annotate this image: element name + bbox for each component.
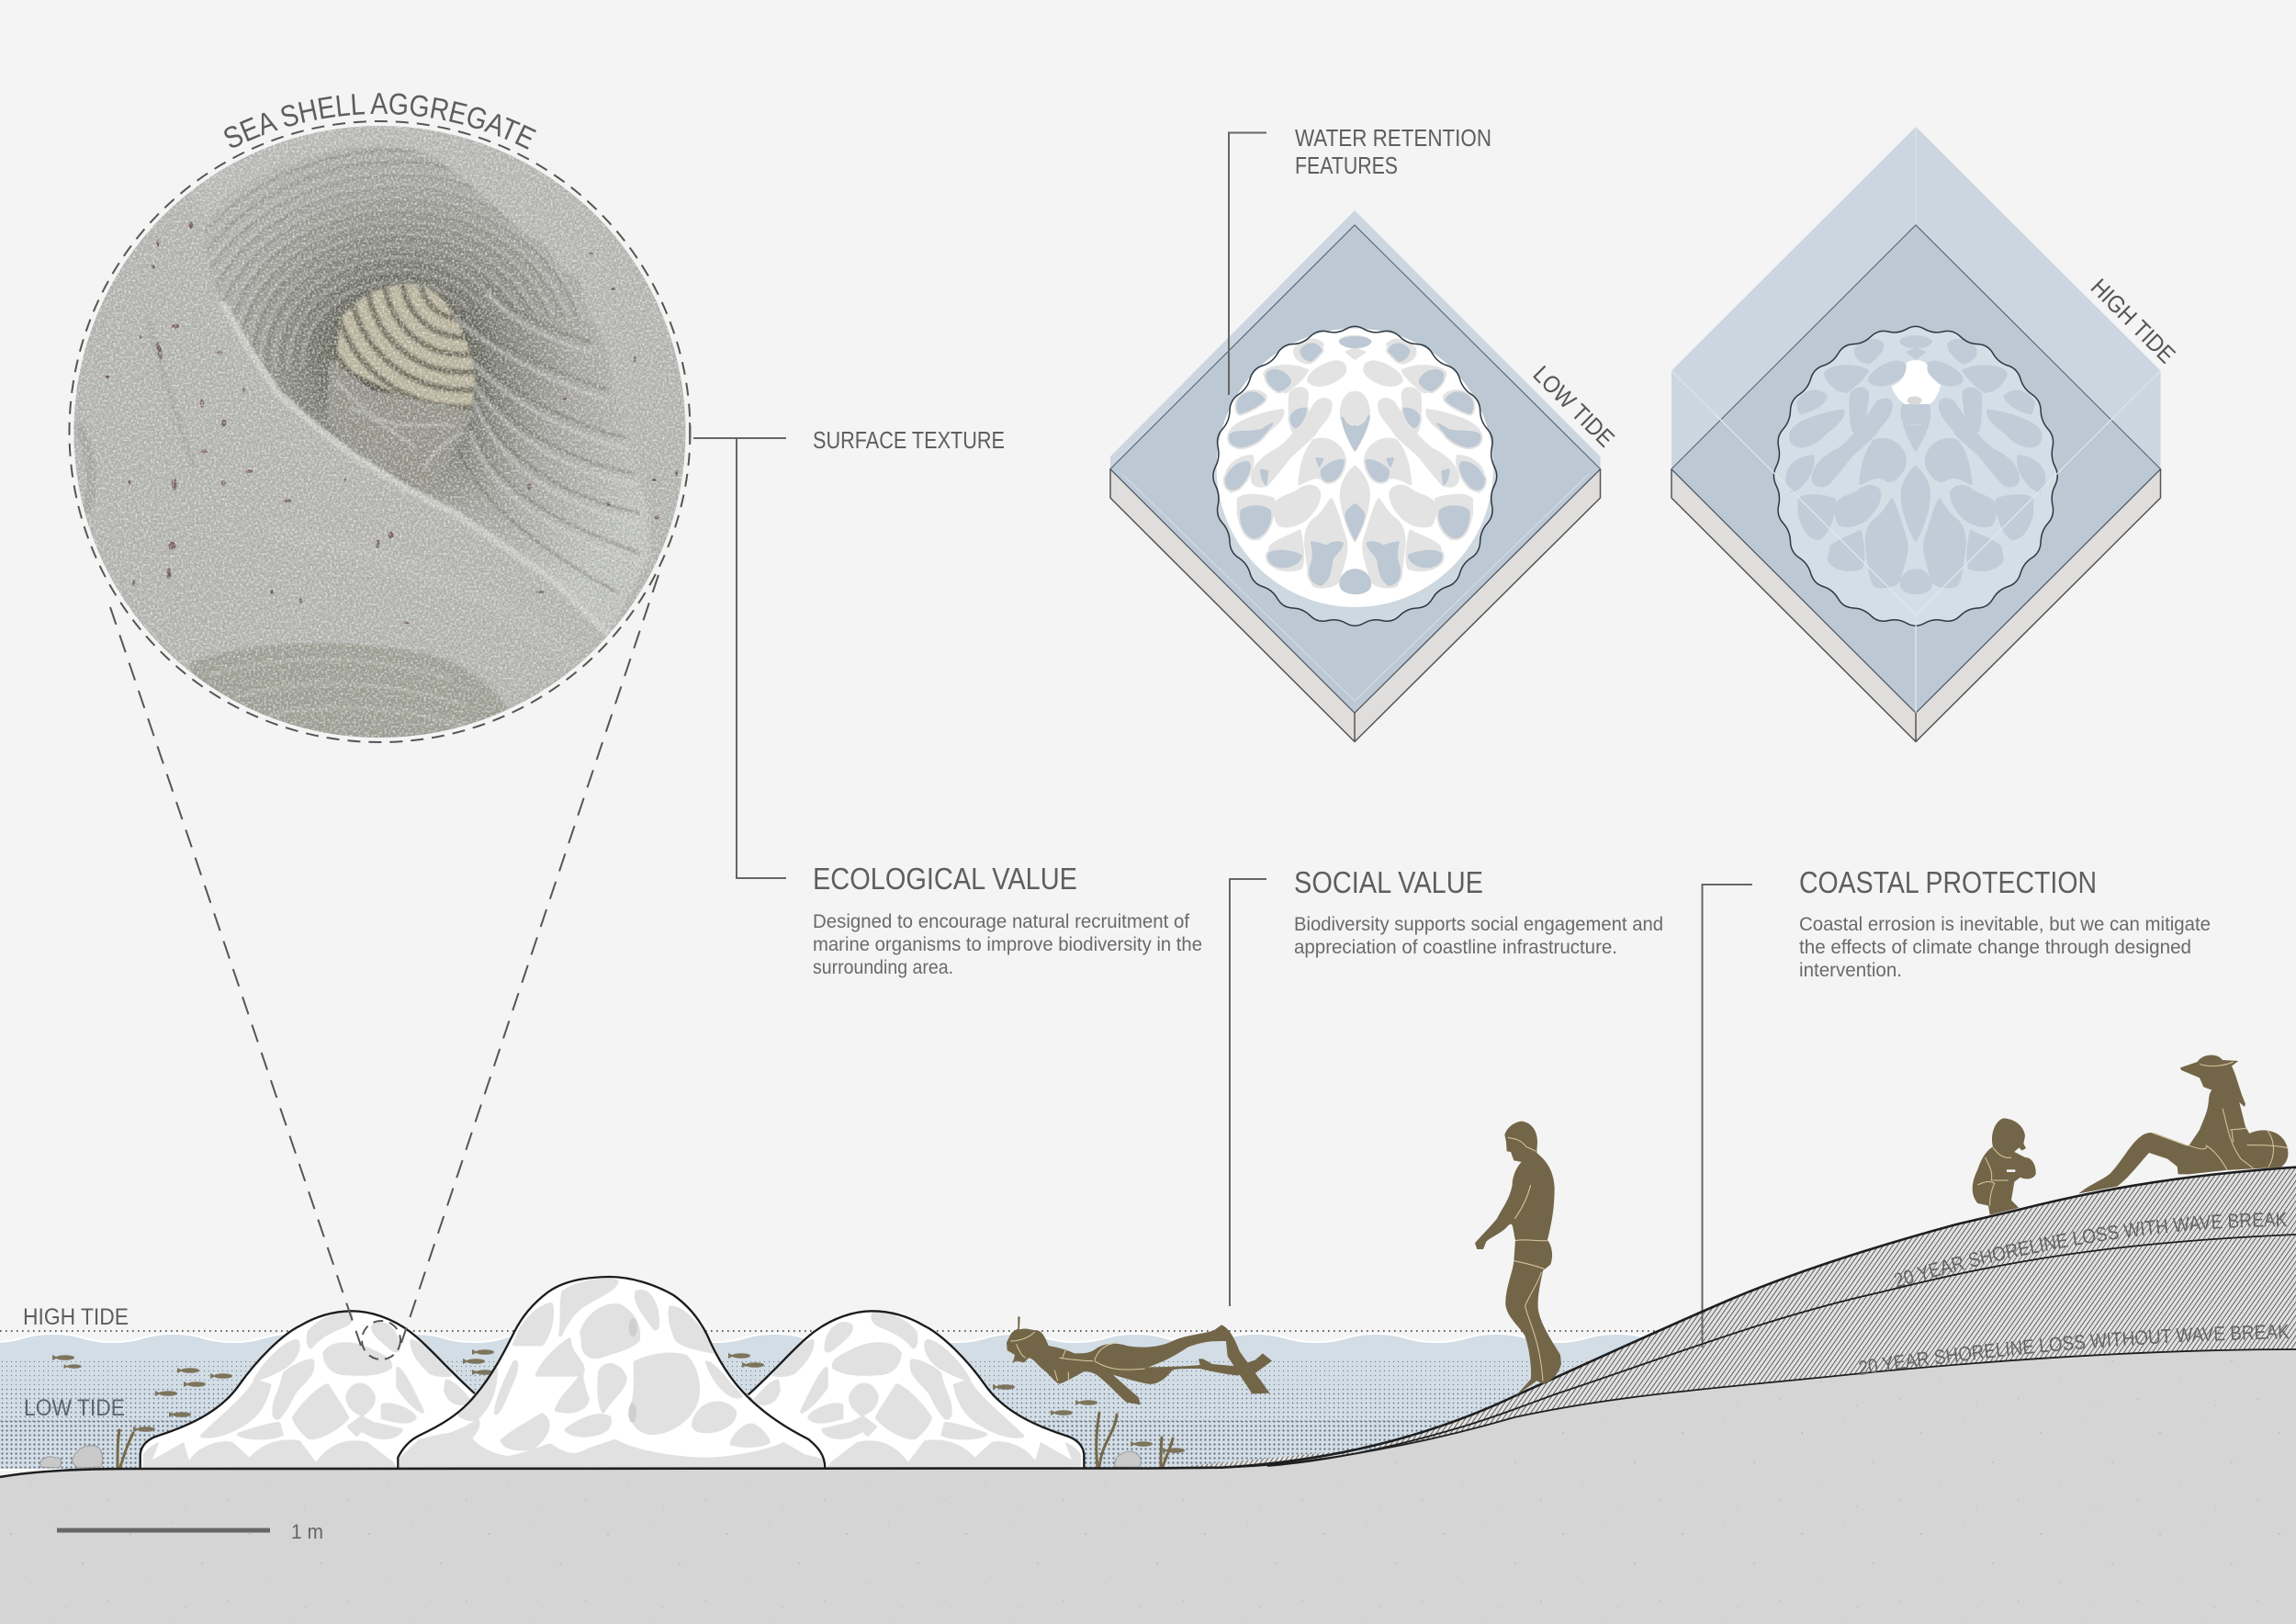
curved heading: sea shell aggregate: SEA SHELL AGGREGATE [224,93,536,150]
water body with halftone [0,1331,1791,1470]
photo grain [73,126,686,739]
dashed projection lines to mound [110,575,658,1359]
text block: coastal protection: Coastal errosion is inevitable, but we can mitigate [1799,914,2211,935]
text block: ecological value: marine organisms to improve biodiversity in the [813,934,1202,955]
exposed peak [1892,360,1941,404]
base side faces [1671,469,2160,742]
scale bar: 1 m [291,1520,323,1543]
scale bar [57,1520,323,1543]
callout: water retention features: FEATURES [1295,152,1398,179]
fish shoal [52,1349,1185,1453]
label: shoreline loss without wave break: 20 YEAR SHORELINE LOSS WITHOUT WAVE BREAK [1859,1325,2289,1375]
inner ribbed throat [336,285,475,419]
figure: snorkeller [1007,1316,1272,1404]
text block: ecological value: surrounding area. [813,957,953,978]
callout: water retention features [1229,124,1491,395]
callout: surface texture [690,423,1005,878]
rocks and seaweed [40,1413,1173,1468]
text block: ecological value [813,862,1202,978]
label: low tide: LOW TIDE [1528,360,1620,452]
text block: coastal protection: COASTAL PROTECTION [1799,865,2097,899]
text block: ecological value: ECOLOGICAL VALUE [813,862,1077,896]
label: high tide: HIGH TIDE [2086,273,2181,368]
text block: coastal protection [1703,865,2211,1348]
wave break mound: centre [398,1277,825,1468]
tide floor [1110,225,1600,713]
panel: high tide plan [1671,127,2160,742]
panel: low tide plan [1110,210,1600,742]
text block: coastal protection: the effects of climate change through designed [1799,937,2191,958]
wave break mound: left [141,1311,476,1468]
submerged shell plan [1773,326,2057,626]
text block: social value: SOCIAL VALUE [1294,865,1483,899]
water layer [1110,210,1600,713]
text block: social value [1230,865,1663,1306]
maroon aggregate flecks [105,221,678,625]
dashed lens circle [70,121,691,742]
tide floor [1671,225,2160,713]
swirl ridges [450,285,639,592]
photo: sea shell aggregate close-up [73,126,685,738]
seated woman [2078,1055,2288,1193]
funnel interior [205,146,650,634]
text block: coastal protection: intervention. [1799,960,1902,981]
callout: surface texture: SURFACE TEXTURE [813,426,1005,454]
figure: man walking [1475,1122,1561,1396]
text block: social value: Biodiversity supports social engagement and [1294,914,1663,935]
label: shoreline loss with wave break: 20 YEAR SHORELINE LOSS WITH WAVE BREAK [1894,1212,2287,1288]
base side faces [1110,469,1600,742]
text block: ecological value: Designed to encourage natural recruitment of [813,911,1189,932]
beach: eroded shoreline hatch and ground [0,1167,2296,1624]
child with binoculars [1973,1118,2036,1215]
label: low tide level: LOW TIDE [24,1395,125,1421]
shell plan [1213,326,1497,626]
label: high tide level: HIGH TIDE [23,1304,129,1330]
callout: water retention features: WATER RETENTION [1295,124,1491,152]
lower bowl [189,643,507,738]
foreground rock wedge [73,193,606,709]
water layer [1671,127,2160,713]
wave break mound: right [748,1311,1084,1468]
figures: child and seated woman with beach ball [1973,1055,2289,1215]
text block: social value: appreciation of coastline infrastructure. [1294,937,1617,958]
